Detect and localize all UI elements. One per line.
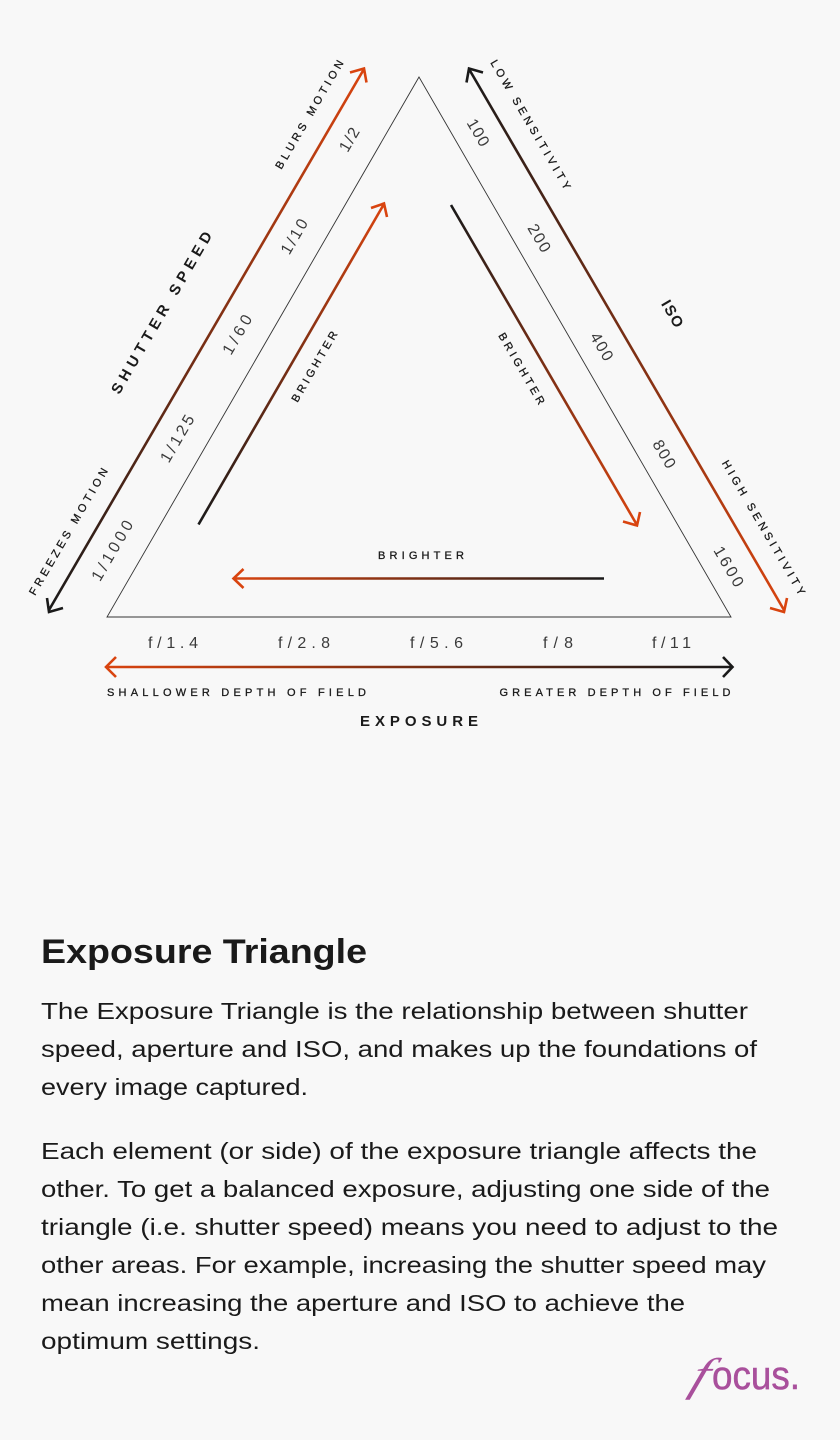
label: brighter bottom: BRIGHTER — [378, 550, 464, 562]
paragraph two: Each element (or side) of the exposure triangle affects the — [41, 1138, 757, 1164]
value: 1/125: 1/125 — [158, 412, 199, 466]
value: f/5.6: f/5.6 — [410, 635, 463, 652]
value: 1600: 1600 — [710, 544, 746, 590]
label: low sensitivity: LOW SENSITIVITY — [487, 58, 573, 192]
value: 1/1000: 1/1000 — [89, 518, 137, 584]
arrow: exposure scale — [106, 657, 732, 677]
logo: focus — [684, 1349, 800, 1400]
paragraph two: mean increasing the aperture and ISO to achieve the — [41, 1290, 685, 1316]
ISO labels — [463, 58, 807, 598]
paragraph one — [41, 998, 758, 1100]
value: 800: 800 — [649, 437, 678, 472]
exposure labels — [107, 550, 731, 730]
value: 1/10: 1/10 — [278, 216, 312, 258]
arrow: shutter speed outer — [47, 68, 366, 612]
arrow: aperture brighter — [234, 569, 604, 588]
label: brighter right: BRIGHTER — [495, 331, 547, 407]
value: 1/60: 1/60 — [220, 312, 256, 358]
label: blurs motion: BLURS MOTION — [274, 58, 346, 172]
label: greater depth of field: GREATER DEPTH OF FIELD — [500, 687, 731, 699]
paragraph two: triangle (i.e. shutter speed) means you need to adjust to the — [41, 1214, 778, 1240]
value: f/11: f/11 — [652, 635, 691, 652]
value: 100: 100 — [463, 116, 492, 150]
label: shallower depth of field: SHALLOWER DEPTH OF FIELD — [107, 687, 366, 699]
value: f/1.4: f/1.4 — [148, 635, 198, 652]
label: high sensitivity: HIGH SENSITIVITY — [719, 458, 807, 598]
label: brighter left: BRIGHTER — [290, 329, 340, 405]
paragraph two: optimum settings. — [41, 1328, 260, 1354]
logo: focus: ocus. — [712, 1354, 800, 1398]
shutter speed labels — [27, 58, 364, 598]
title: Exposure Triangle — [41, 933, 367, 971]
heading: exposure: EXPOSURE — [360, 713, 478, 730]
value: f/2.8: f/2.8 — [278, 635, 330, 652]
heading: shutter speed: SHUTTER SPEED — [108, 229, 216, 397]
exposure triangle diagram — [27, 58, 807, 730]
value: 400: 400 — [586, 330, 616, 364]
value: 1/2: 1/2 — [336, 125, 364, 155]
paragraph one: every image captured. — [41, 1074, 308, 1100]
triangle outline — [107, 77, 731, 617]
arrow: ISO brighter — [451, 205, 640, 526]
value: 200: 200 — [524, 221, 553, 256]
paragraph two — [41, 1138, 778, 1354]
arrow: ISO outer — [466, 68, 787, 612]
paragraph one: speed, aperture and ISO, and makes up the foundations of — [41, 1036, 758, 1062]
heading: ISO: ISO — [657, 297, 687, 331]
paragraph two: other. To get a balanced exposure, adjusting one side of the — [41, 1176, 770, 1202]
paragraph two: other areas. For example, increasing the shutter speed may — [41, 1252, 766, 1278]
logo: focus: f — [684, 1349, 726, 1400]
arrow: shutter speed brighter — [198, 204, 387, 524]
value: f/8: f/8 — [543, 635, 573, 652]
paragraph one: The Exposure Triangle is the relationship between shutter — [41, 998, 748, 1024]
label: freezes motion: FREEZES MOTION — [27, 466, 111, 598]
